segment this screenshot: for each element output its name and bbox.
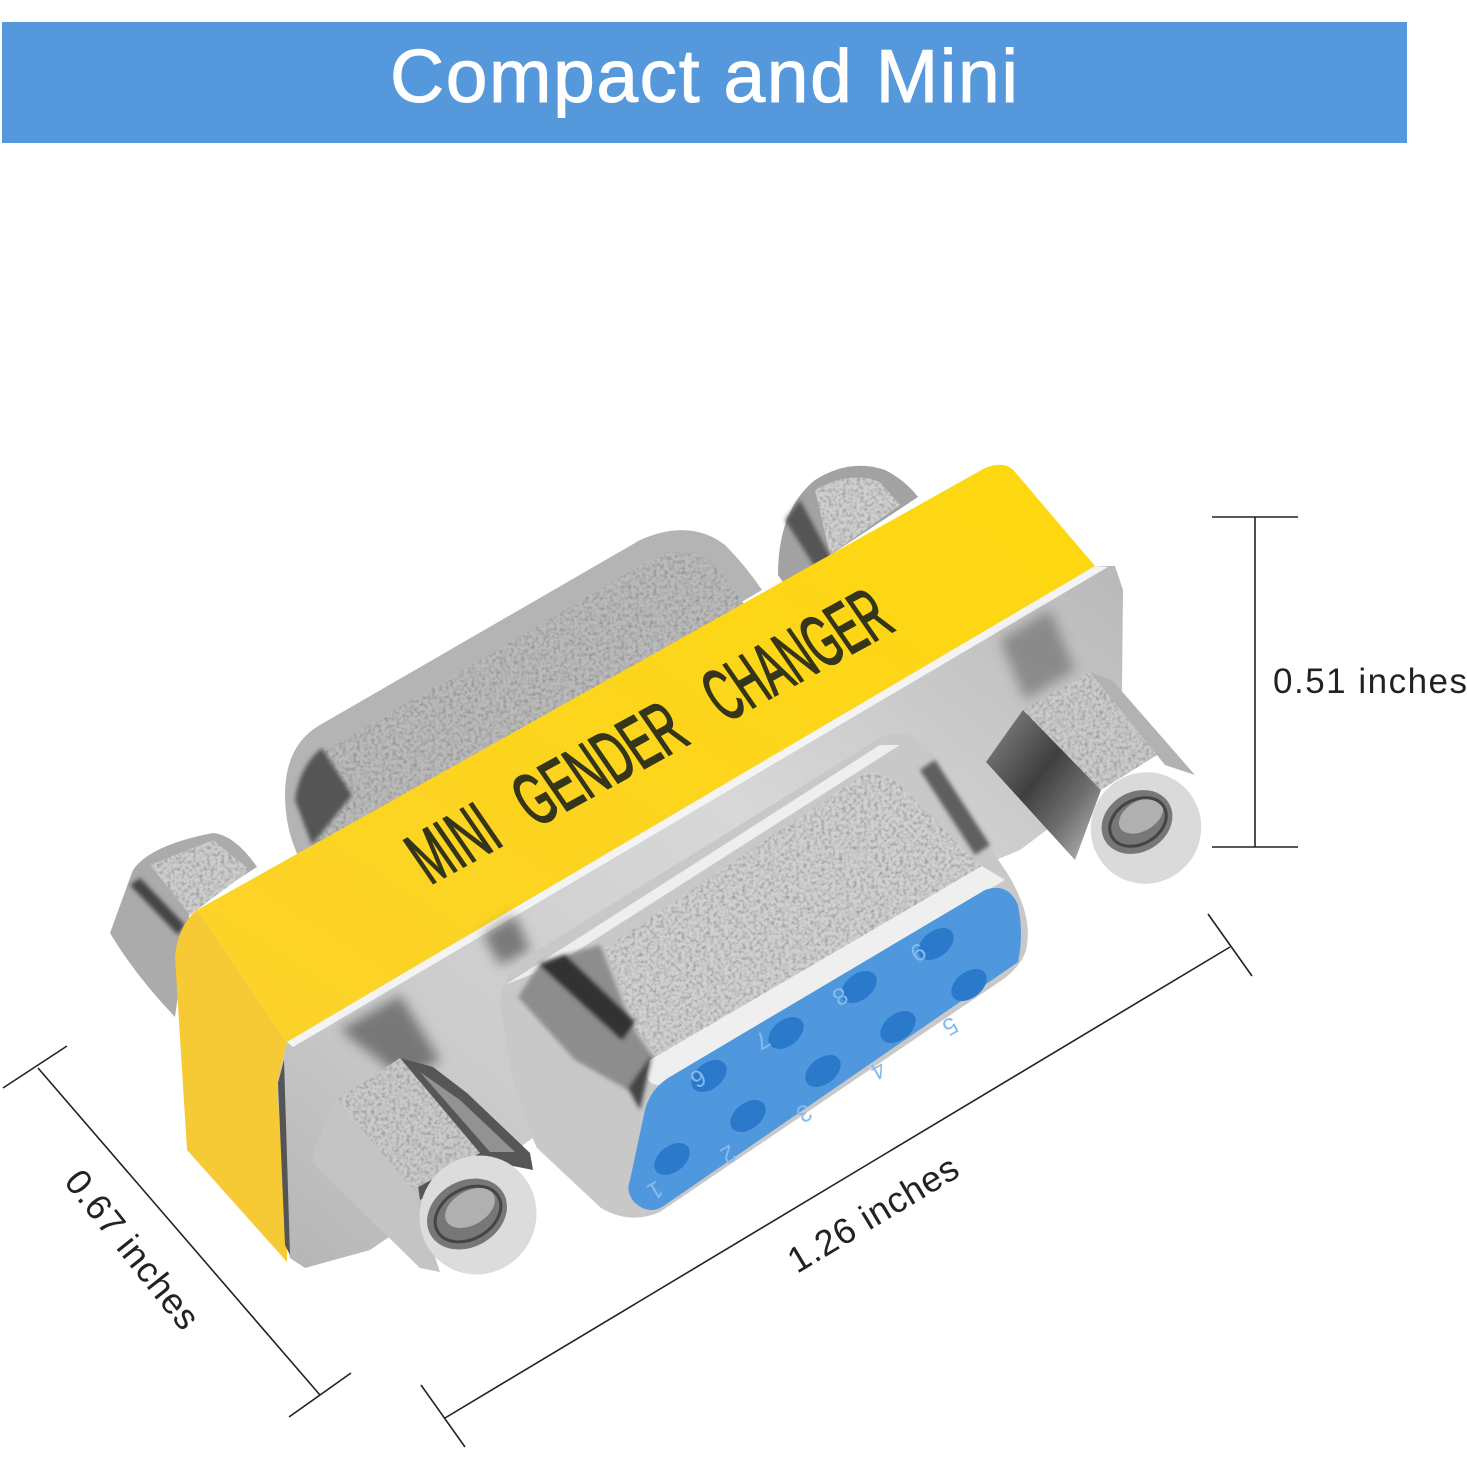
rear right standoff — [778, 466, 918, 585]
dimension: length 1.26 inches: 1.26 inches — [780, 1147, 966, 1281]
shell left side wall — [518, 945, 655, 1090]
band printed label — [391, 573, 906, 898]
molded pin numbers: 4 — [865, 1055, 890, 1085]
front left standoff threaded end — [398, 1134, 558, 1296]
dimension: width 0.67 inches — [3, 1046, 351, 1417]
pin holes — [648, 921, 993, 1182]
front D-shell — [500, 734, 1028, 1218]
shell upper rim highlight — [505, 745, 900, 985]
band printed label: GENDER — [496, 686, 701, 841]
dimension: height 0.51 inches: 0.51 inches — [1273, 662, 1467, 701]
molded pin numbers: 7 — [749, 1025, 774, 1055]
product photo: mini gender changer connector — [110, 465, 1222, 1296]
molded pin numbers: 5 — [937, 1011, 962, 1041]
molded pin numbers: 1 — [642, 1175, 668, 1205]
molded pin numbers: 3 — [791, 1098, 816, 1128]
blue connector face — [628, 888, 1021, 1210]
yellow band top face — [197, 465, 1095, 1042]
dimension: width 0.67 inches: 0.67 inches — [57, 1161, 208, 1337]
molded pin numbers: 6 — [685, 1063, 710, 1093]
rear left standoff — [110, 833, 257, 1017]
band printed label: CHANGER — [686, 573, 906, 736]
shell textured top — [605, 772, 985, 1058]
rear D-shell — [285, 530, 762, 860]
molded pin numbers: 8 — [827, 981, 852, 1011]
molded pin numbers: 9 — [905, 937, 930, 967]
molded pin numbers — [642, 937, 962, 1205]
front right hex standoff — [986, 672, 1222, 904]
title text: Compact and Mini — [390, 34, 1018, 118]
front edge highlight — [647, 866, 1005, 1085]
front right standoff threaded end — [1070, 752, 1222, 904]
dimension: length 1.26 inches — [421, 914, 1252, 1447]
band printed label: MINI — [391, 788, 515, 898]
metal flange plate — [277, 566, 1123, 1268]
molded pin numbers: 2 — [715, 1139, 740, 1169]
dimension: height 0.51 inches — [1212, 517, 1467, 847]
yellow band end face — [175, 910, 287, 1262]
front left hex standoff — [313, 1058, 558, 1296]
title banner — [2, 22, 1407, 143]
